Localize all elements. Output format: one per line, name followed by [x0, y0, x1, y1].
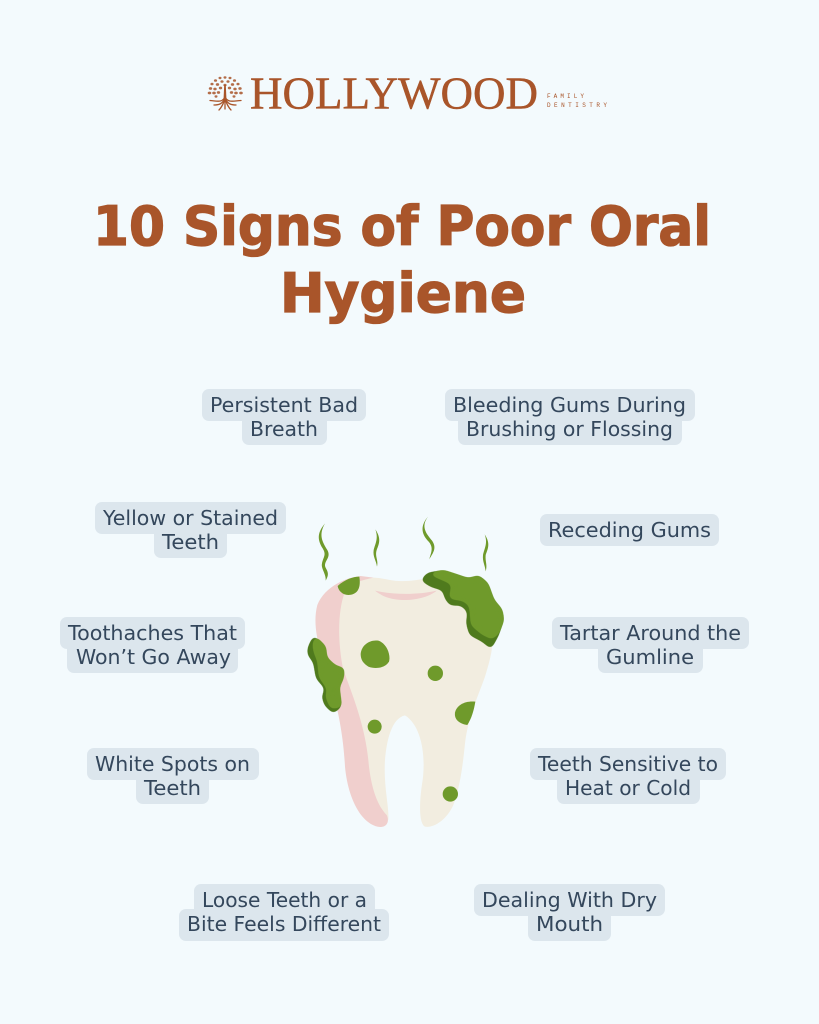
- plaque spots: [338, 577, 475, 802]
- plaque: left side, dark layer: [309, 638, 342, 711]
- gum-pink shading strip: [315, 576, 388, 827]
- label: White Spots on Teeth: Teeth: [143, 776, 201, 800]
- title: Hygiene: [280, 262, 526, 325]
- label: Teeth Sensitive to Heat or Cold: Teeth Sensitive to: [537, 752, 718, 776]
- label: Bleeding Gums During Brushing or Flossing: [445, 389, 695, 445]
- label: Yellow or Stained Teeth: Teeth: [161, 530, 219, 554]
- plaque: upper right, dark layer: [423, 572, 502, 647]
- label: Persistent Bad Breath: Breath: [250, 417, 318, 441]
- label: Dealing With Dry Mouth: Dealing With Dry: [482, 888, 657, 912]
- label: White Spots on Teeth: [87, 748, 259, 804]
- label: Persistent Bad Breath: [202, 389, 366, 445]
- logo tagline: [547, 93, 607, 109]
- label: Tartar Around the Gumline: [552, 617, 749, 673]
- plaque: upper right, light layer: [433, 572, 502, 637]
- label: Teeth Sensitive to Heat or Cold: Heat or Cold: [565, 776, 691, 800]
- label: Receding Gums: [540, 514, 719, 546]
- label: Tartar Around the Gumline: Gumline: [606, 645, 694, 669]
- label: Yellow or Stained Teeth: [95, 502, 286, 558]
- label: Toothaches That Won't Go Away: Won’t Go Away: [76, 645, 231, 669]
- label: Loose Teeth or a Bite Feels Different: Loose Teeth or a: [202, 888, 367, 912]
- label: Tartar Around the Gumline: Tartar Around the: [559, 621, 741, 645]
- pink crown crease: [375, 591, 437, 600]
- title: [93, 195, 711, 325]
- title: 10 Signs of Poor Oral: [93, 195, 711, 258]
- label: Toothaches That Won't Go Away: [60, 617, 245, 673]
- label: Receding Gums: Receding Gums: [548, 518, 711, 542]
- icon: tree with roots: [208, 76, 243, 110]
- label: Bleeding Gums During Brushing or Flossing: Brushing or Flossing: [466, 417, 673, 441]
- logo tagline: FAMILY: [547, 93, 584, 100]
- illustration: decaying tooth: [309, 517, 502, 827]
- label: Persistent Bad Breath: Persistent Bad: [210, 393, 358, 417]
- label: Dealing With Dry Mouth: Mouth: [536, 912, 603, 936]
- logo tagline: DENTISTRY: [547, 102, 607, 109]
- plaque: left side, light layer: [315, 639, 342, 707]
- logo: Hollywood Family Dentistry: [208, 68, 607, 118]
- label: Yellow or Stained Teeth: Yellow or Stained: [102, 506, 278, 530]
- label: Teeth Sensitive to Heat or Cold: [530, 748, 726, 804]
- label: Dealing With Dry Mouth: [474, 884, 665, 941]
- label: Bleeding Gums During Brushing or Flossing: Bleeding Gums During: [453, 393, 686, 417]
- label: Loose Teeth or a Bite Feels Different: [179, 884, 389, 941]
- label: White Spots on Teeth: White Spots on: [95, 752, 250, 776]
- label: Loose Teeth or a Bite Feels Different: Bite Feels Different: [187, 912, 381, 936]
- label: Toothaches That Won't Go Away: Toothaches That: [67, 621, 237, 645]
- logo wordmark: HOLLYWOOD: [250, 68, 538, 118]
- tooth body: [330, 577, 492, 827]
- stink lines: [319, 517, 488, 581]
